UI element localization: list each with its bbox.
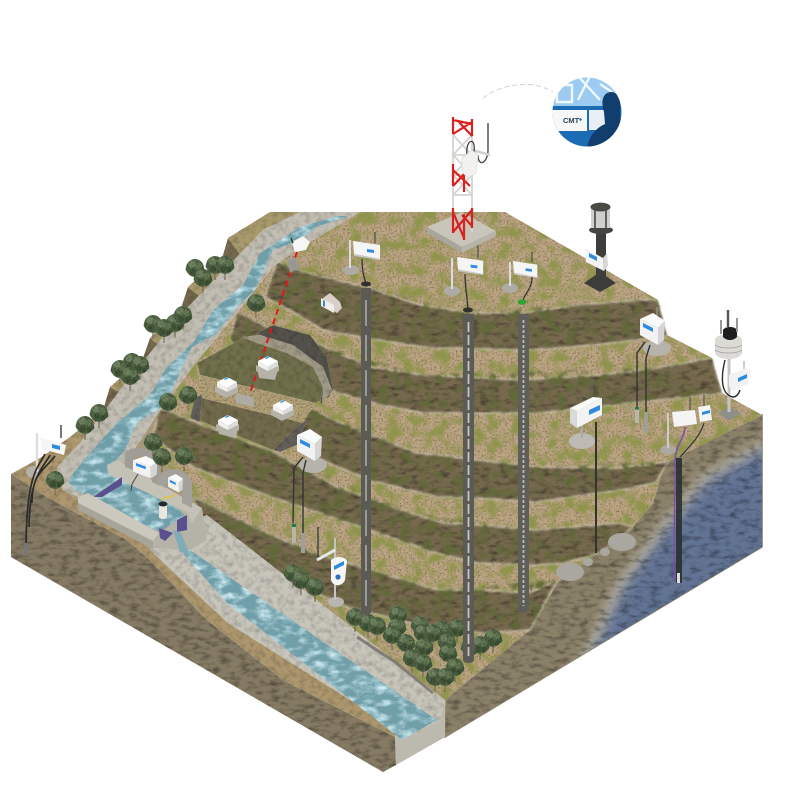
hillside base xyxy=(150,212,762,705)
light rock strip xyxy=(242,335,332,403)
purple weir walls xyxy=(93,477,187,541)
twin logger on pole xyxy=(660,395,712,455)
weir structure xyxy=(68,448,207,555)
grass patches xyxy=(150,212,762,705)
quarry ledge xyxy=(198,375,315,423)
borehole logger two xyxy=(444,245,483,312)
trees on lower slope xyxy=(284,564,502,692)
right cliff face xyxy=(445,415,775,737)
borehole logger one xyxy=(343,232,380,286)
front slab xyxy=(78,493,159,541)
upper water channel xyxy=(57,212,360,497)
quarry lower face xyxy=(198,397,303,450)
spillway concrete xyxy=(187,508,207,550)
left bank ground strip xyxy=(11,437,395,737)
borehole logger three xyxy=(502,252,537,305)
CMT control room circle xyxy=(552,78,622,146)
wall end face xyxy=(396,705,445,765)
well device two xyxy=(168,474,183,493)
borehole two xyxy=(463,314,474,663)
channel concrete xyxy=(57,212,360,497)
small wall logger xyxy=(321,293,342,313)
red lattice xyxy=(453,117,472,240)
tower antenna xyxy=(478,123,488,163)
quarry back wall xyxy=(197,338,330,403)
well device one xyxy=(133,456,158,478)
weather station xyxy=(715,310,750,421)
borehole one xyxy=(361,288,371,615)
groundwater tint xyxy=(574,434,762,659)
cable xyxy=(131,474,138,491)
terrace faces xyxy=(153,262,722,633)
lower rocks xyxy=(190,395,307,452)
red laser line xyxy=(250,252,297,393)
channel water xyxy=(70,216,348,492)
laser sensor with base xyxy=(287,236,310,273)
weather beacon xyxy=(584,203,616,292)
communication tower xyxy=(427,117,496,253)
logger with two probes xyxy=(635,307,671,433)
spillway water xyxy=(173,530,190,555)
back slab xyxy=(107,460,202,530)
concrete pad xyxy=(427,212,496,247)
antenna arm xyxy=(472,150,490,155)
basin water xyxy=(68,457,185,532)
white lattice xyxy=(453,117,472,232)
well one xyxy=(125,448,160,486)
terrain silhouette underlay xyxy=(11,212,762,772)
quarry loggers xyxy=(215,356,294,438)
channel walls xyxy=(150,515,445,765)
basin floor xyxy=(78,465,202,550)
moss on terrace faces xyxy=(153,262,722,630)
lower water channel xyxy=(150,515,445,765)
left stepped terraces xyxy=(70,212,302,445)
submersible sensor xyxy=(158,494,175,519)
dark streak on wall rim xyxy=(357,637,433,693)
dashed connection arc xyxy=(483,84,553,98)
cable loop xyxy=(467,141,474,155)
front slab face xyxy=(78,503,153,549)
CMT logo text: CMT xyxy=(563,116,580,125)
channel water xyxy=(178,548,437,740)
left cliff face xyxy=(11,474,396,772)
slope logger with probes xyxy=(292,429,327,553)
tower gateway xyxy=(462,150,478,178)
far-left logger with cables xyxy=(24,425,66,555)
dark rock outcrop xyxy=(257,325,333,405)
logger over piezometer xyxy=(569,380,602,553)
boulders xyxy=(556,533,636,581)
level sensor with arm xyxy=(317,527,347,607)
trees along channel xyxy=(46,256,266,495)
deep groundwater borehole xyxy=(674,423,704,583)
borehole three xyxy=(518,314,529,613)
quarry area xyxy=(190,325,333,452)
well two xyxy=(158,470,192,508)
person silhouette xyxy=(587,92,622,148)
